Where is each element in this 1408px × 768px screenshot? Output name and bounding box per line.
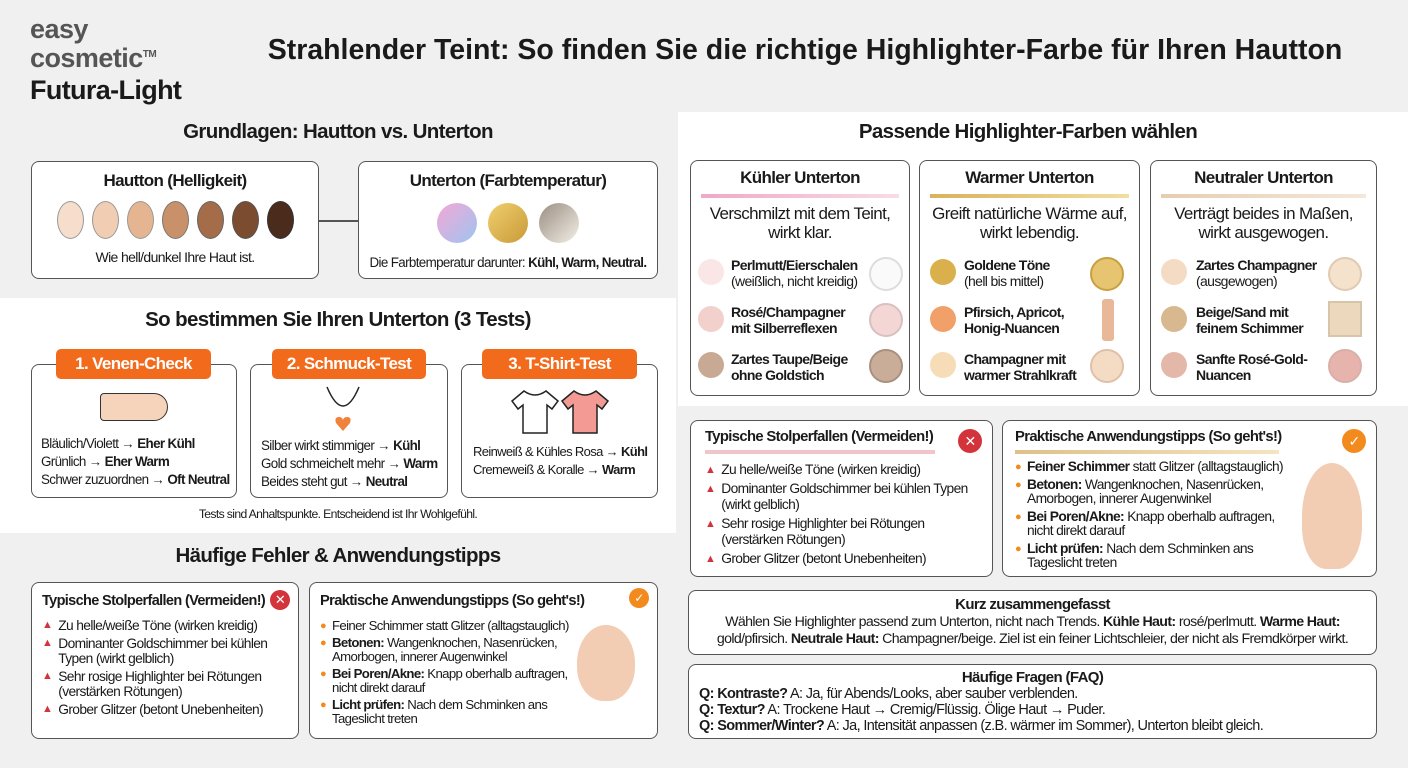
panel: Kurz zusammengefasst: gold/pfirsich. Neutrale Haut: Champagner/beige. Ziel ist ein feiner Lichtschleier, der nicht als Fremdkörper wirkt. [717,631,1348,647]
panel: FAQ: Q: Textur? A: Trockene Haut → Cremig/Flüssig. Ölige Haut → Puder. [699,702,1105,718]
panel: FAQ [688,664,1377,739]
panel: Anwendungstipps right: ● [1015,510,1021,522]
panel: FAQ: Q: Sommer/Winter? A: Ja, Intensität anpassen (z.B. wärmer im Sommer), Unterton bleibt gleich. [699,718,1263,734]
panel: Kühler Unterton [690,160,910,396]
panel: Warmer Unterton: Greift natürliche Wärme auf, [932,204,1127,223]
panel: T-Shirt-Test: Cremeweiß & Koralle → Warm [473,462,635,477]
panel: Kühler Unterton: Verschmilzt mit dem Teint, [710,204,890,223]
icon: face [577,625,635,701]
panel: Warmer Unterton: Champagner mit [964,351,1066,367]
panel: Warmer Unterton: Warmer Unterton [965,168,1094,187]
panel: Anwendungstipps right: ● [1015,461,1021,473]
panel: T-Shirt-Test: Reinweiß & Kühles Rosa → Kühl [473,444,647,459]
panel: Neutraler Unterton: wirkt ausgewogen. [1199,223,1328,242]
panel: Anwendungstipps right: ✓ [1348,433,1360,449]
panel: Anwendungstipps right: Praktische Anwendungstipps (So geht's!) [1015,429,1282,445]
panel: Anwendungstipps left: Praktische Anwendungstipps (So geht's!) [320,593,584,609]
panel: Neutraler Unterton: Sanfte Rosé-Gold- [1196,351,1307,367]
heading: Passende Highlighter-Farben: Passende Highlighter-Farben wählen [859,120,1197,143]
title: Strahlender Teint: So finden Sie die richtige Highlighter-Farbe für Ihren Hautton [268,34,1342,66]
panel: Neutraler Unterton [1150,160,1377,396]
panel: Hautton: Wie hell/dunkel Ihre Haut ist. [96,249,254,265]
panel: Kühler Unterton: Kühler Unterton [740,168,860,187]
panel: Stolperfallen left: Grober Glitzer (betont Unebenheiten) [58,702,263,717]
panel: Neutraler Unterton: feinem Schimmer [1196,320,1303,336]
panel: T-Shirt-Test [461,364,658,498]
text: 2. Schmuck-Test [287,354,411,373]
panel: Stolperfallen right: Zu helle/weiße Töne (wirken kreidig) [721,462,920,477]
panel: Anwendungstipps left [309,582,658,739]
panel: Anwendungstipps left: Betonen: Wangenknochen, Nasenrücken, Amorbogen, innerer Augenwinkel [332,635,557,664]
panel: Neutraler Unterton: (ausgewogen) [1196,273,1277,289]
logo: Futura-Light [30,75,181,105]
panel: Anwendungstipps right: ● [1015,478,1021,490]
panel: Schmuck-Test: Silber wirkt stimmiger → Kühl [261,438,420,453]
panel: Anwendungstipps left: ✓ [634,591,644,605]
logo: easy [30,14,88,44]
panel: Schmuck-Test: Gold schmeichelt mehr → Warm [261,456,438,471]
panel: Kühler Unterton: Perlmutt/Eierschalen [731,257,857,273]
panel: Stolperfallen right: Sehr rosige Highlighter bei Rötungen (verstärken Rötungen) [721,516,924,547]
panel: Unterton: Die Farbtemperatur darunter: Kühl, Warm, Neutral. [370,255,646,270]
panel: Stolperfallen left: ▲ [42,670,52,682]
panel: Warmer Unterton: Pfirsich, Apricot, [964,304,1064,320]
panel: Warmer Unterton: Honig-Nuancen [964,320,1059,336]
icon: face [1302,463,1362,569]
panel: Venen-Check: Bläulich/Violett → Eher Kühl [41,436,195,451]
panel: Stolperfallen left: ▲ [42,619,52,631]
panel: Unterton: Unterton (Farbtemperatur) [410,171,606,190]
panel: Warmer Unterton: (hell bis mittel) [964,273,1043,289]
icon: t-shirts [511,390,609,434]
text: 3. T-Shirt-Test [508,354,611,373]
panel: Schmuck-Test [250,364,448,498]
icon: faces [57,201,294,239]
panel: Stolperfallen left: Dominanter Goldschimmer bei kühlen Typen (wirkt gelblich) [58,636,267,666]
heading: Häufige Fehler: Häufige Fehler & Anwendungstipps [176,544,500,567]
panel: Venen-Check [31,364,237,498]
panel: Venen-Check: Schwer zuzuordnen → Oft Neutral [41,472,230,487]
panel: Neutraler Unterton: Verträgt beides in Maßen, [1174,204,1353,223]
panel: Kühler Unterton: mit Silberreflexen [731,320,837,336]
logo: cosmeticTM [30,43,156,73]
panel: Warmer Unterton: warmer Strahlkraft [964,367,1076,383]
panel: Kühler Unterton: ohne Goldstich [731,367,824,383]
panel: Anwendungstipps left: ● [320,620,326,632]
logo [30,14,182,105]
panel: Anwendungstipps left: ● [320,699,326,711]
panel: Stolperfallen right [690,420,993,577]
panel: Hautton [31,161,319,279]
panel: Stolperfallen left: Sehr rosige Highlighter bei Rötungen (verstärken Rötungen) [58,669,261,699]
panel: Stolperfallen right: ✕ [964,433,976,449]
panel: Anwendungstipps right [1002,420,1377,577]
panel: Anwendungstipps left: Feiner Schimmer statt Glitzer (alltagstauglich) [332,618,569,633]
panel: Anwendungstipps right: ● [1015,542,1021,554]
panel: Anwendungstipps right: Licht prüfen: Nach dem Schminken ans Tageslicht treten [1027,540,1253,570]
panel: Anwendungstipps left: ● [320,668,326,680]
panel: Neutraler Unterton: Nuancen [1196,367,1251,383]
panel: Kühler Unterton: (weißlich, nicht kreidig) [731,273,857,289]
panel: Neutraler Unterton: Beige/Sand mit [1196,304,1288,320]
heading: So bestimmen: So bestimmen Sie Ihren Unterton (3 Tests) [145,308,531,331]
panel: Anwendungstipps left: ● [320,637,326,649]
icon: necklace [326,386,360,431]
icon: colour dots [437,203,579,243]
panel: Anwendungstipps right: Feiner Schimmer statt Glitzer (alltagstauglich) [1027,459,1283,474]
panel: Neutraler Unterton: Neutraler Unterton [1194,168,1333,187]
panel: Hautton: Hautton (Helligkeit) [103,171,247,190]
panel: Stolperfallen right: ▲ [705,518,715,530]
panel: Anwendungstipps left: Bei Poren/Akne: Knapp oberhalb auftragen, nicht direkt darauf [332,666,567,695]
panel: Venen-Check: Grünlich → Eher Warm [41,454,169,469]
panel: Kühler Unterton: Rosé/Champagner [731,304,845,320]
panel: Schmuck-Test: Beides steht gut → Neutral [261,474,407,489]
panel: Kurz zusammengefasst: Kurz zusammengefasst [955,596,1110,613]
panel: Stolperfallen left: ▲ [42,637,52,649]
panel: Anwendungstipps left: Licht prüfen: Nach dem Schminken ans Tageslicht treten [332,697,547,726]
text: 1. Venen-Check [75,354,192,373]
panel: Stolperfallen left: ▲ [42,703,52,715]
panel: FAQ: Q: Kontraste? A: Ja, für Abends/Looks, aber sauber verblenden. [699,686,1078,702]
panel: Kurz zusammengefasst [688,590,1377,655]
panel: Neutraler Unterton: Zartes Champagner [1196,257,1317,273]
panel: Kühler Unterton: wirkt klar. [768,223,832,242]
panel: Stolperfallen right: Typische Stolperfallen (Vermeiden!) [705,429,933,445]
panel: Unterton [358,161,658,279]
panel: Stolperfallen left [31,582,299,739]
panel: Stolperfallen left: ✕ [275,592,285,607]
panel: Anwendungstipps right: Betonen: Wangenknochen, Nasenrücken, Amorbogen, innerer Augenwinkel [1027,476,1263,506]
panel: Stolperfallen right: Dominanter Goldschimmer bei kühlen Typen (wirkt gelblich) [721,481,968,512]
panel: Kurz zusammengefasst: Wählen Sie Highlighter passend zum Unterton, nicht nach Trends. Kühle Haut: rosé/perlmutt. Warme Haut: [725,614,1340,630]
panel: Stolperfallen right: ▲ [705,464,715,476]
panel: Stolperfallen left: Zu helle/weiße Töne (wirken kreidig) [58,618,257,633]
panel: Warmer Unterton: Goldene Töne [964,257,1050,273]
panel: Stolperfallen right: ▲ [705,483,715,495]
note: Tests sind Anhaltspunkte. Entscheidend ist Ihr Wohlgefühl. [199,507,477,521]
heading: Grundlagen: Grundlagen: Hautton vs. Unterton [183,120,493,143]
panel: Warmer Unterton: wirkt lebendig. [980,223,1079,242]
panel: FAQ: Häufige Fragen (FAQ) [962,669,1103,686]
panel: Kühler Unterton: Zartes Taupe/Beige [731,351,848,367]
panel: Warmer Unterton [919,160,1140,396]
panel: Anwendungstipps right: Bei Poren/Akne: Knapp oberhalb auftragen, nicht direkt darauf [1027,508,1275,538]
section backgrounds [0,298,676,533]
panel: Stolperfallen right: ▲ [705,553,715,565]
panel: Stolperfallen left: Typische Stolperfallen (Vermeiden!) [42,593,265,609]
panel: Stolperfallen right: Grober Glitzer (betont Unebenheiten) [721,551,926,566]
icon: hand [100,393,168,421]
